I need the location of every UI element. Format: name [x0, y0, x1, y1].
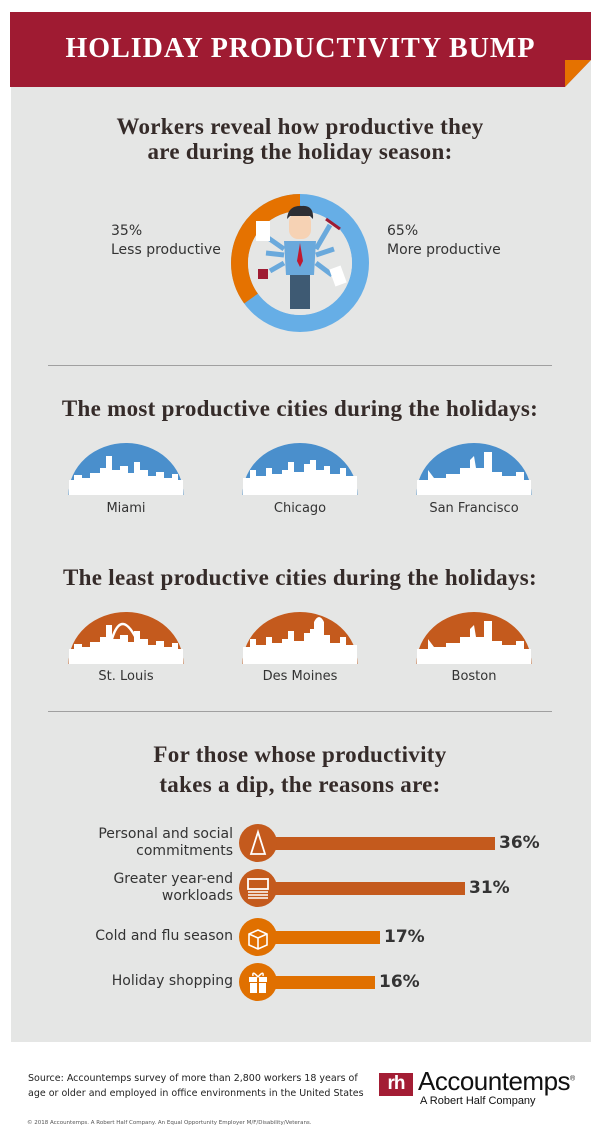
- bar: year-end workloads 31%: Greater year-end: [113, 871, 233, 887]
- bar: holiday shopping 16%: [112, 963, 420, 1001]
- icon: businessman: [256, 206, 347, 309]
- heading: workers reveal: [116, 114, 484, 164]
- city labels: least: Boston: [452, 669, 496, 684]
- bar: personal and social 36%: Personal and social: [98, 826, 233, 842]
- source text: [28, 1073, 364, 1099]
- heading: reasons: For those whose productivity: [153, 742, 447, 767]
- dome: Miami: [68, 443, 184, 495]
- heading: workers reveal: Workers reveal how productive they: [116, 114, 484, 139]
- city labels: least: Des Moines: [263, 669, 337, 684]
- bar: cold and flu 17%: Cold and flu season: [95, 928, 233, 944]
- donut chart: [231, 194, 369, 332]
- bar: year-end workloads 31%: 31%: [469, 878, 510, 898]
- bar: cold and flu 17%: 17%: [384, 927, 425, 947]
- source text: age or older and employed in office environments in the United States: [28, 1088, 364, 1099]
- label: 35%: 35%: [111, 223, 142, 239]
- city labels: least: [98, 669, 496, 684]
- dome: St. Louis: [68, 612, 184, 664]
- label: 35%: Less productive: [111, 242, 221, 258]
- heading: least productive cities: The least productive cities during the holidays:: [63, 565, 537, 590]
- label: 35%: [111, 223, 221, 258]
- logo: Accountemps: rh: [388, 1073, 404, 1094]
- bar: personal and social 36%: commitments: [136, 843, 233, 859]
- dome: Chicago: [242, 443, 358, 495]
- dome: San Francisco: [416, 443, 532, 495]
- label: 65%: More productive: [387, 242, 501, 258]
- heading: workers reveal: are during the holiday season:: [147, 139, 453, 164]
- corner fold: [565, 60, 591, 87]
- bar chart: reasons: [95, 824, 540, 1001]
- city labels: most: Miami: [106, 501, 146, 516]
- city domes: most productive: [68, 443, 532, 495]
- header banner: [10, 12, 591, 87]
- title: HOLIDAY PRODUCTIVITY BUMP: [66, 33, 535, 64]
- divider: [48, 711, 552, 712]
- dome: Des Moines: [242, 612, 358, 664]
- bar: holiday shopping 16%: 16%: [379, 972, 420, 992]
- heading: reasons: takes a dip, the reasons are:: [159, 772, 441, 797]
- logo: Accountemps: A Robert Half Company: [420, 1095, 536, 1107]
- city domes: least productive: [68, 612, 532, 664]
- city labels: least: St. Louis: [98, 669, 154, 684]
- bar: holiday shopping 16%: Holiday shopping: [112, 973, 233, 989]
- heading: reasons: [153, 742, 447, 797]
- city labels: most: Chicago: [274, 501, 326, 516]
- heading: most productive cities: The most productive cities during the holidays:: [62, 396, 538, 421]
- source text: Source: Accountemps survey of more than 2,800 workers 18 years of: [28, 1073, 358, 1084]
- copyright: © 2018 Accountemps. A Robert Half Company. An Equal Opportunity Employer M/F/Disability/Veterans.: [27, 1120, 312, 1126]
- logo: Accountemps: [379, 1066, 576, 1107]
- divider: [48, 365, 552, 366]
- bar: year-end workloads 31%: workloads: [162, 888, 233, 904]
- dome: Boston: [416, 612, 532, 664]
- bar: cold and flu 17%: [95, 918, 425, 956]
- bar: personal and social 36%: 36%: [499, 833, 540, 853]
- label: 65%: [387, 223, 501, 258]
- logo: Accountemps: Accountemps®: [418, 1066, 575, 1096]
- bar: personal and social 36%: [98, 824, 540, 862]
- city labels: most: [106, 501, 519, 516]
- bar: year-end workloads 31%: [113, 869, 510, 907]
- city labels: most: San Francisco: [429, 501, 519, 516]
- label: 65%: 65%: [387, 223, 418, 239]
